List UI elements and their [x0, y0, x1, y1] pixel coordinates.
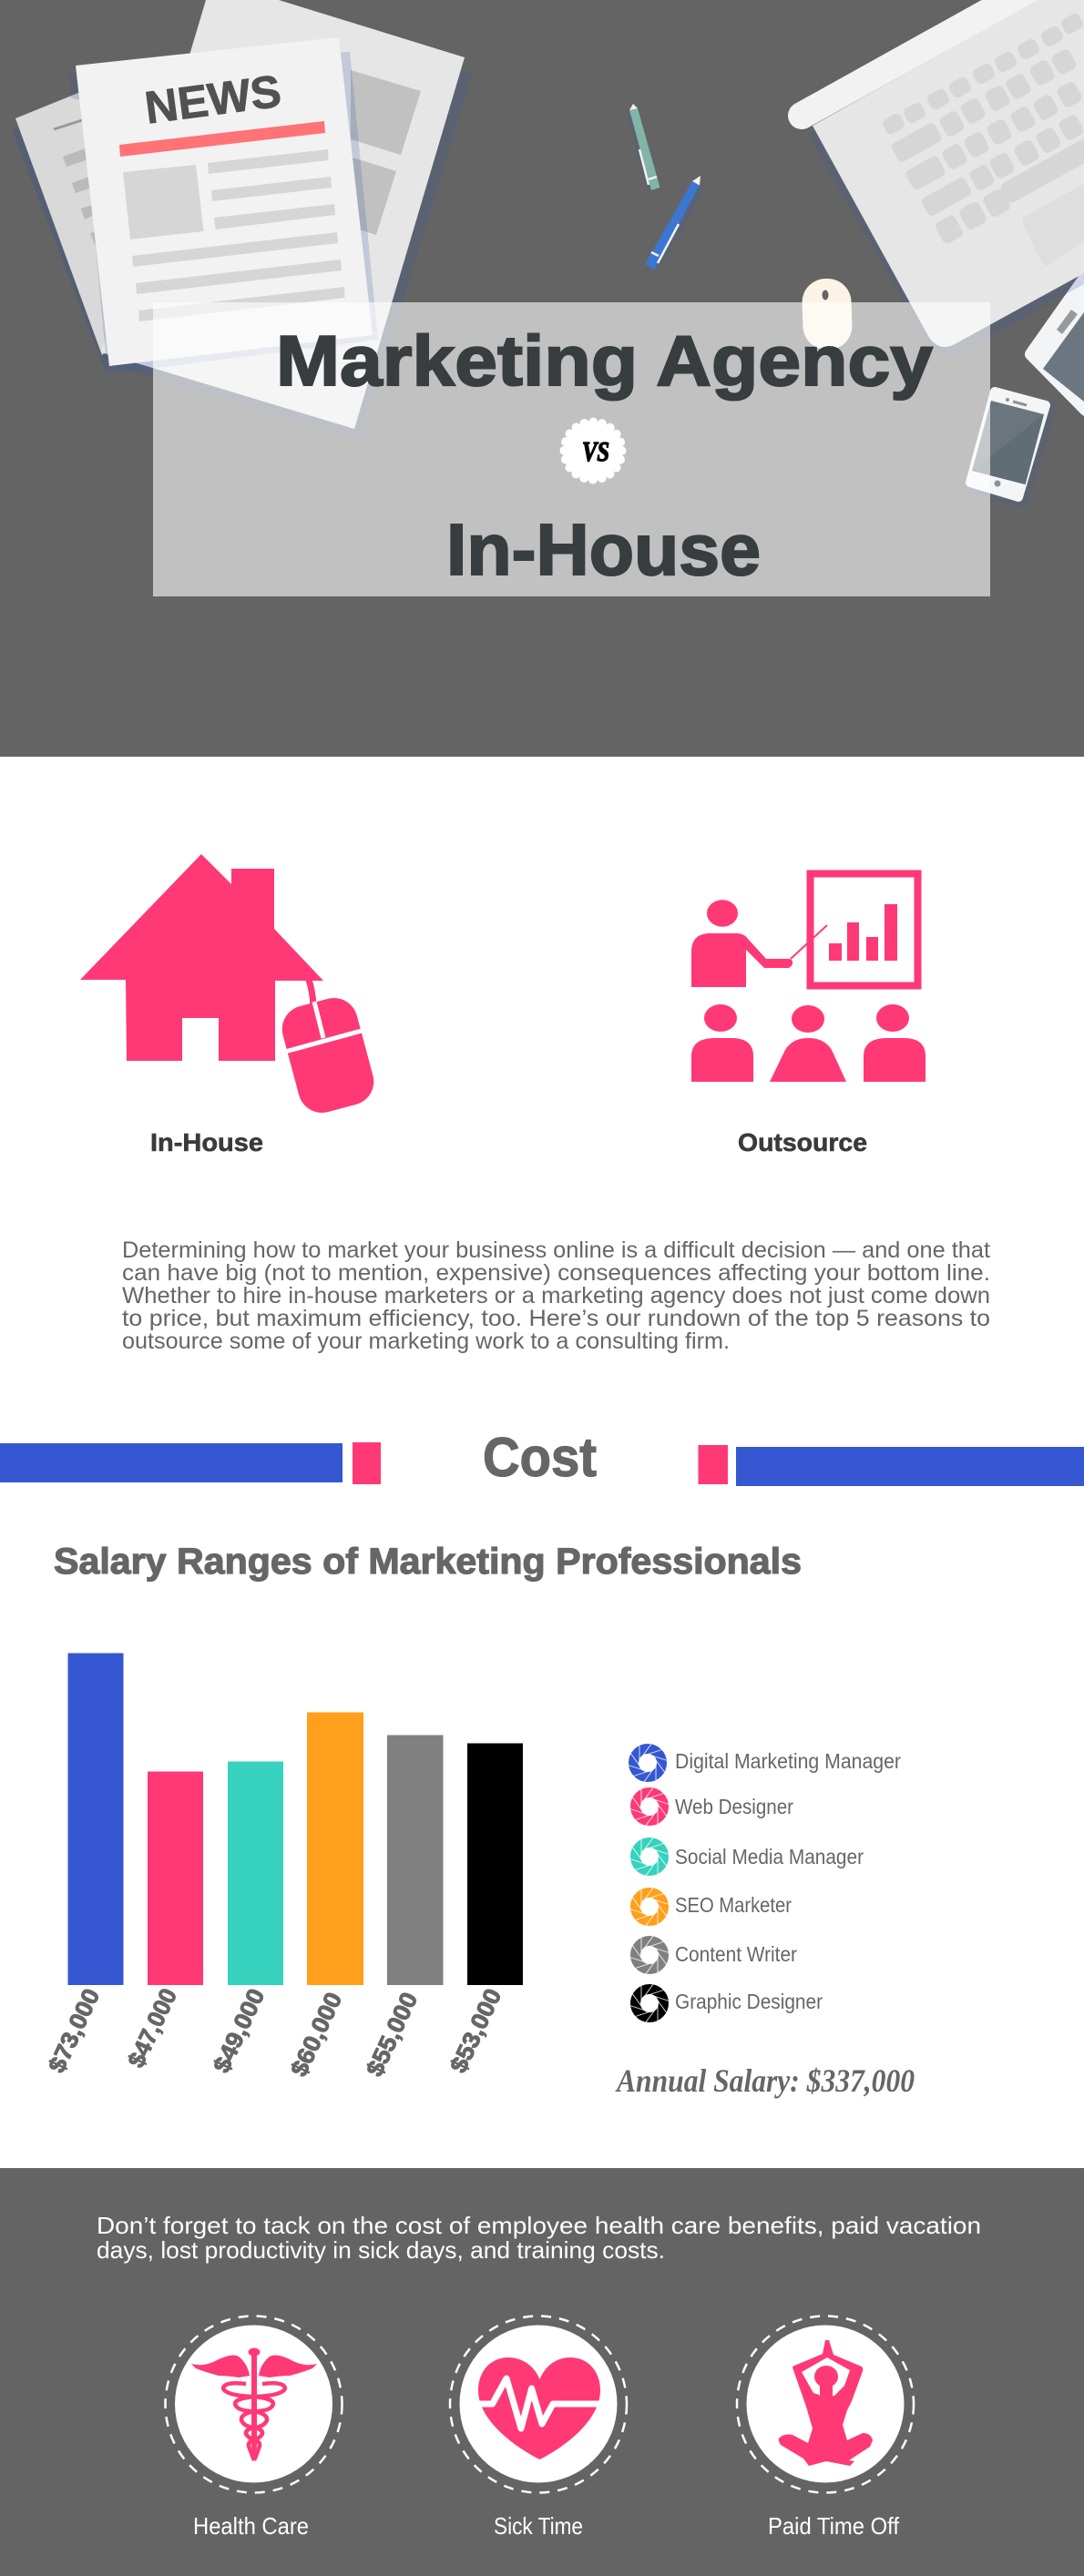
- section banner: Cost: Cost: [483, 1427, 597, 1488]
- title panel: [153, 302, 990, 596]
- legend: Digital Marketing Manager: [675, 1749, 901, 1773]
- footer text: [97, 2212, 981, 2264]
- label: Paid Time Off: Paid Time Off: [768, 2512, 900, 2540]
- label: Health Care: Health Care: [193, 2512, 309, 2540]
- icon: phone: [969, 392, 1053, 504]
- bar chart: salaries: $47,000: [122, 1984, 182, 2072]
- bar chart: salaries: $53,000: [445, 1984, 506, 2077]
- legend: Social Media Manager: [675, 1845, 864, 1868]
- title: In-House: In-House: [446, 509, 761, 590]
- label: In-House: In-House: [150, 1128, 263, 1156]
- panel: additional costs: [0, 2168, 1084, 2576]
- intro paragraph: Whether to hire in-house marketers or a marketing agency does not just come down: [122, 1283, 990, 1308]
- icon: sick time heart: [450, 2316, 627, 2493]
- bar chart: salaries: $55,000: [361, 1988, 423, 2081]
- intro paragraph: can have big (not to mention, expensive) consequences affecting your bottom line.: [122, 1260, 990, 1286]
- legend: Graphic Designer: [675, 1990, 823, 2013]
- label: Sick Time: Sick Time: [494, 2512, 583, 2540]
- bar chart: salaries: $73,000: [43, 1984, 105, 2077]
- annual salary total: Annual Salary: $337,000: [615, 2062, 915, 2099]
- legend: [629, 1744, 901, 2022]
- footer text: days, lost productivity in sick days, and training costs.: [97, 2236, 665, 2264]
- legend: SEO Marketer: [675, 1893, 792, 1917]
- icon: health care caduceus: [166, 2316, 343, 2493]
- icon: laptop: [802, 0, 1084, 357]
- heading: salary ranges: Salary Ranges of Marketing Professionals: [54, 1542, 802, 1582]
- icon: blue pen: [645, 176, 704, 272]
- icon: presenter and audience: [691, 874, 925, 1082]
- intro paragraph: Determining how to market your business online is a difficult decision — and one that: [122, 1237, 990, 1263]
- bar chart: salaries: $49,000: [208, 1984, 270, 2077]
- vs badge: [564, 422, 622, 480]
- newspaper masthead: NEWS: [142, 66, 284, 134]
- icon: green pen: [626, 104, 660, 192]
- vs badge: VS: [582, 435, 609, 467]
- icon: tablet: [1029, 277, 1084, 421]
- bar chart: salaries: $60,000: [285, 1988, 347, 2081]
- title: Marketing Agency: Marketing Agency: [276, 321, 933, 401]
- icon: newspapers: [12, 0, 473, 440]
- legend: Web Designer: [675, 1795, 793, 1818]
- icon: mouse: [802, 278, 853, 351]
- panel: header: [0, 0, 1084, 757]
- intro paragraph: [122, 1237, 990, 1354]
- footer text: Don’t forget to tack on the cost of employee health care benefits, paid vacation: [97, 2212, 981, 2239]
- bar chart: salaries: [43, 1654, 523, 2081]
- icon: house with mouse: [80, 854, 379, 1118]
- intro paragraph: to price, but maximum efficiency, too. Here’s our rundown of the top 5 reasons to: [122, 1306, 990, 1331]
- icon: paid time off yoga figure: [737, 2316, 914, 2493]
- legend: Content Writer: [675, 1942, 797, 1966]
- label: Outsource: Outsource: [738, 1128, 867, 1156]
- intro paragraph: outsource some of your marketing work to a consulting firm.: [122, 1329, 730, 1354]
- section banner: Cost: [0, 1427, 1084, 1488]
